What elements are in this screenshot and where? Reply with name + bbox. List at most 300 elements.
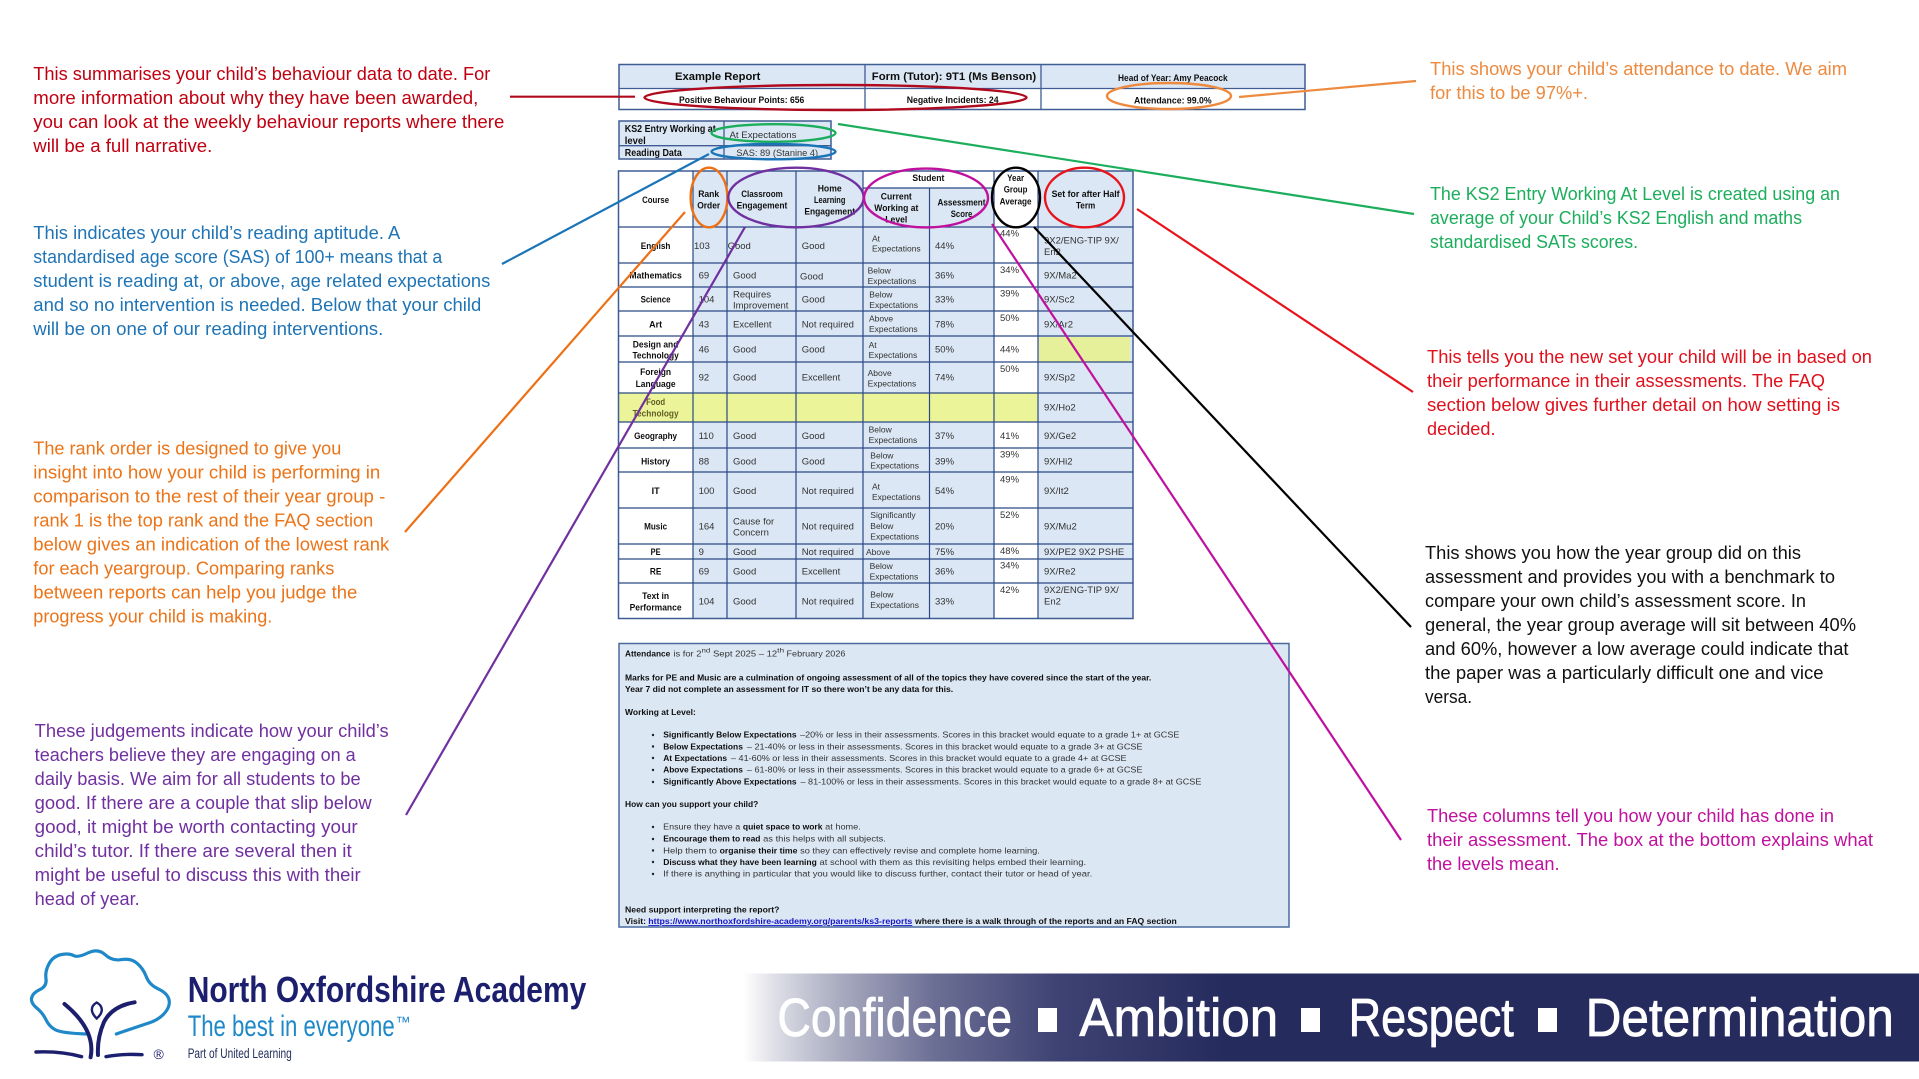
row: Mathematics: 69 xyxy=(699,271,709,282)
table column headers: Classroom xyxy=(741,189,783,200)
row: History: Good xyxy=(802,456,825,467)
row: Text in Performance: Expectations xyxy=(870,600,919,610)
text block: rank order: insight into how your child is performing in xyxy=(33,462,380,482)
attendance dates line: th xyxy=(777,648,784,654)
KS2 entry and reading data table: SAS: 89 (Stanine 4) xyxy=(736,148,818,159)
row: Art: 78% xyxy=(935,320,955,331)
report header table: Attendance: 99.0% xyxy=(1134,96,1212,106)
row: Art: 9X/Ar2 xyxy=(1044,320,1073,331)
values banner xyxy=(743,974,1919,1062)
row: PE: 9X/PE2 9X2 PSHE xyxy=(1044,547,1124,558)
table column headers: Assessment xyxy=(938,198,986,209)
text block: rank order: below gives an indication of the lowest rank xyxy=(33,534,390,554)
table column headers: Home xyxy=(818,183,842,194)
report header table: Head of Year: Amy Peacock xyxy=(1118,73,1228,84)
text block: reading aptitude: and so no intervention is needed. Below that your child xyxy=(33,295,481,315)
highlight ellipse: year group average xyxy=(992,168,1040,227)
table column headers: Student xyxy=(912,173,945,184)
text block: assessment columns: These columns tell you how your child has done in xyxy=(1427,806,1834,826)
row: History: 88 xyxy=(699,456,709,467)
table column headers xyxy=(642,173,1120,226)
arrow line: rank order xyxy=(405,212,685,532)
text block: year group average: general, the year group average will sit between 40% xyxy=(1425,615,1856,635)
row: Mathematics: Below xyxy=(868,266,892,276)
text block: attendance: for this to be 97%+. xyxy=(1430,83,1588,103)
row: Mathematics xyxy=(629,265,1077,286)
text block: engagement judgements xyxy=(35,721,389,909)
row: Geography: 9X/Ge2 xyxy=(1044,431,1076,442)
table column headers: Group xyxy=(1004,185,1028,196)
row: Science: Good xyxy=(802,295,825,306)
text block: year group average: the paper was a particularly difficult one and vice xyxy=(1425,663,1824,683)
row: English xyxy=(641,228,1119,258)
text block: rank order: The rank order is designed to give you xyxy=(33,438,341,458)
text block: set after half term xyxy=(1427,347,1872,439)
row: Science: 104 xyxy=(699,295,714,306)
row: Music: Significantly xyxy=(870,510,916,520)
KS2 entry and reading data table: At Expectations xyxy=(730,130,797,141)
text block: attendance: This shows your child’s attendance to date. We aim xyxy=(1430,59,1847,79)
row: Design and Technology: At xyxy=(869,340,877,350)
KS2 entry and reading data table: level xyxy=(625,136,646,147)
row: IT: 9X/It2 xyxy=(1044,486,1069,497)
text block: year group average: and 60%, however a low average could indicate that xyxy=(1425,639,1848,659)
row: Design and Technology: Good xyxy=(733,345,756,356)
row: Music: Concern xyxy=(733,528,769,539)
working at level list: Above Expectations xyxy=(663,765,743,775)
row: Geography: 37% xyxy=(935,431,955,442)
working at level list: – 21-40% or less in their assessments. Scores in this bracket would equate to a grade 3+ at GCSE xyxy=(747,741,1143,751)
arrow line: student columns xyxy=(992,224,1401,840)
arrow line: KS2 xyxy=(838,124,1414,214)
row: History: 39% xyxy=(935,456,955,467)
working at level list: – 41-60% or less in their assessments. Scores in this bracket would equate to a grade 4+ at GCSE xyxy=(731,753,1127,763)
row: History: Below xyxy=(870,450,894,460)
text block: reading aptitude: student is reading at, or above, age related expectations xyxy=(33,271,490,291)
row: IT: At xyxy=(872,482,881,492)
row: PE: Good xyxy=(733,547,756,558)
text block: KS2 entry level: average of your Child’s KS2 English and maths xyxy=(1430,208,1802,228)
text block: rank order: comparison to the rest of their year group - xyxy=(33,486,385,506)
row: IT xyxy=(652,474,1069,502)
KS2 entry and reading data table xyxy=(619,121,831,159)
row: Mathematics: Good xyxy=(733,271,756,282)
row: English: 103 xyxy=(694,241,710,252)
value: Ambition: Ambition xyxy=(1079,988,1278,1048)
text block: rank order xyxy=(33,438,390,626)
row: History xyxy=(641,450,1073,471)
row: PE: 48% xyxy=(1000,546,1020,557)
row: Geography: Good xyxy=(802,431,825,442)
attendance dates line: February 2026 xyxy=(786,648,846,658)
trademark: ™ xyxy=(396,1014,410,1031)
text block: year group average xyxy=(1425,543,1856,707)
report header table: Positive Behaviour Points: 656 xyxy=(679,95,804,106)
row: Music xyxy=(644,510,1077,542)
row: Food Technology: 9X/Ho2 xyxy=(1044,403,1076,414)
row: English: Expectations xyxy=(872,243,921,253)
table column headers: Average xyxy=(1000,196,1032,207)
row: Design and Technology: 46 xyxy=(699,345,709,356)
attendance dates line: is for 2 xyxy=(673,648,702,658)
row: Geography: Below xyxy=(869,425,893,435)
row: English: 9X2/ENG-TIP 9X/ xyxy=(1044,235,1119,246)
how to support list: Ensure they have a xyxy=(663,822,740,832)
text block: behaviour: more information about why they have been awarded, xyxy=(33,88,478,108)
text block: assessment columns: the levels mean. xyxy=(1427,854,1560,874)
row: Mathematics: 36% xyxy=(935,271,955,282)
how to support list: Help them to xyxy=(663,845,717,855)
text block: year group average: assessment and provides you with a benchmark to xyxy=(1425,567,1835,587)
row: RE xyxy=(650,560,1076,581)
report header table xyxy=(619,64,1305,110)
row: Design and Technology: 44% xyxy=(1000,345,1020,356)
row: Foreign Language: 92 xyxy=(699,373,709,384)
text block: set after half term: section below gives further detail on how setting is xyxy=(1427,395,1840,415)
text block: rank order: rank 1 is the top rank and the FAQ section xyxy=(33,510,373,530)
highlight ellipse: engagement xyxy=(728,168,864,227)
registered mark: ® xyxy=(154,1046,164,1062)
row: Art: Expectations xyxy=(869,324,918,334)
text block: behaviour: will be a full narrative. xyxy=(32,136,212,156)
text block: reading aptitude: standardised age score (SAS) of 100+ means that a xyxy=(33,247,443,267)
table column headers: Learning xyxy=(814,195,846,206)
table column headers: Engagement xyxy=(737,201,788,212)
text block: rank order: progress your child is making. xyxy=(33,606,272,626)
how to support list: at home. xyxy=(825,822,861,832)
row: Geography: Good xyxy=(733,431,756,442)
row: PE: Not required xyxy=(802,547,854,558)
working at level list: Significantly Below Expectations xyxy=(663,730,797,740)
text block: engagement judgements: daily basis. We aim for all students to be xyxy=(35,769,361,789)
row: Music: Below xyxy=(870,521,894,531)
row: PE xyxy=(651,546,1124,558)
subject results table xyxy=(618,171,1133,618)
row: Mathematics: Mathematics xyxy=(629,271,682,282)
row: History: Good xyxy=(733,456,756,467)
text block: year group average: compare your own child’s assessment score. In xyxy=(1425,591,1806,611)
row: IT: 49% xyxy=(1000,474,1020,485)
row: English: English xyxy=(641,241,671,252)
working at level list: –20% or less in their assessments. Scores in this bracket would equate to a grade 1+ at GCSE xyxy=(800,730,1180,740)
how to support list: Encourage them to read xyxy=(663,834,760,844)
row: Science: Requires xyxy=(733,289,771,300)
working at level list: Significantly Above Expectations xyxy=(663,777,797,787)
how to support list: organise their time xyxy=(720,845,798,855)
row: English: 44% xyxy=(1000,228,1020,239)
row: Food Technology: Food xyxy=(646,397,665,408)
row: Music: 164 xyxy=(699,522,714,533)
KS2 entry and reading data table: Reading Data xyxy=(625,148,682,159)
attendance dates line xyxy=(625,648,846,658)
KS2 entry and reading data table: KS2 Entry Working at xyxy=(625,124,716,135)
row: Geography: Geography xyxy=(634,431,678,442)
row: RE: 9X/Re2 xyxy=(1044,567,1076,578)
table column headers: Term xyxy=(1076,201,1095,212)
row: Art: Art xyxy=(649,320,663,331)
row: Text in Performance: Good xyxy=(733,597,756,608)
row: Foreign Language: Expectations xyxy=(868,379,916,389)
row: Foreign Language: 50% xyxy=(1000,364,1020,375)
row: IT: 100 xyxy=(699,486,714,497)
table column headers: Course xyxy=(642,195,669,206)
arrow line: behaviour xyxy=(510,96,635,98)
row: RE: RE xyxy=(650,567,661,578)
row: Text in Performance: Text in xyxy=(642,591,669,602)
row: Text in Performance: Below xyxy=(870,590,894,600)
row: PE: 75% xyxy=(935,547,955,558)
working at level list: – 81-100% or less in their assessments. Scores in this bracket would equate to a grade 8+ at GCSE xyxy=(800,777,1202,787)
table column headers: Score xyxy=(951,209,972,220)
support link xyxy=(625,904,1177,926)
table column headers: Order xyxy=(697,201,720,212)
row: Foreign Language: 74% xyxy=(935,373,955,384)
text block: year group average: This shows you how the year group did on this xyxy=(1425,543,1801,563)
highlight ellipse: behaviour xyxy=(644,85,1026,110)
text block: behaviour xyxy=(32,64,504,156)
row: Text in Performance: En2 xyxy=(1044,597,1061,608)
row: PE: PE xyxy=(651,547,661,558)
table column headers: Year xyxy=(1007,173,1024,184)
row: Foreign Language: Excellent xyxy=(802,373,841,384)
icon: tree outline xyxy=(31,951,169,1034)
support link: where there is a walk through of the reports and an FAQ section xyxy=(914,916,1177,926)
highlight ellipse: attendance xyxy=(1107,83,1231,109)
text block: set after half term: This tells you the new set your child will be in based on xyxy=(1427,347,1872,367)
working at level list: Below Expectations xyxy=(663,741,743,751)
row: Design and Technology: Good xyxy=(802,345,825,356)
row: Science xyxy=(641,289,1075,312)
support link: Need support interpreting the report? xyxy=(625,904,779,914)
row: English: 44% xyxy=(935,241,955,252)
row: IT: Good xyxy=(733,486,756,497)
row: Music: Cause for xyxy=(733,516,774,527)
value: Determination: Determination xyxy=(1586,988,1894,1048)
row: History: 9X/Hi2 xyxy=(1044,456,1073,467)
separator square xyxy=(1301,1008,1320,1032)
row: Science: Science xyxy=(641,295,671,306)
text block: reading aptitude xyxy=(32,223,490,339)
text block: reading aptitude: This indicates your child’s reading aptitude. A xyxy=(33,223,400,243)
row: Music: 20% xyxy=(935,522,955,533)
academy name: North Oxfordshire Academy xyxy=(188,969,586,1010)
row: Geography: 110 xyxy=(699,431,714,442)
row: Geography xyxy=(634,425,1076,445)
row: IT: Not required xyxy=(802,486,854,497)
row: Music: Expectations xyxy=(870,532,919,542)
working at level list: – 61-80% or less in their assessments. Scores in this bracket would equate to a grade 6+ at GCSE xyxy=(747,765,1143,775)
row: Mathematics: 34% xyxy=(1000,265,1020,276)
row: PE: Above xyxy=(866,547,890,557)
separator square xyxy=(1038,1008,1057,1032)
how to support list: at school with them as this revisiting helps embed their learning. xyxy=(820,857,1086,867)
row: Food Technology xyxy=(633,397,1076,420)
attendance dates line: nd xyxy=(702,648,710,654)
how to support list: If there is anything in particular that you would like to discuss further, contact their tutor or head of year. xyxy=(663,869,1092,879)
how to support list: so they can effectively revise and complete home learning. xyxy=(800,845,1040,855)
row: IT: Expectations xyxy=(872,492,921,502)
text block: behaviour: you can look at the weekly behaviour reports where there xyxy=(33,112,504,132)
row: Art: 50% xyxy=(1000,313,1020,324)
row: Text in Performance: 42% xyxy=(1000,585,1020,596)
row: RE: Expectations xyxy=(870,571,918,581)
row: English: Good xyxy=(728,241,751,252)
row: RE: 36% xyxy=(935,567,955,578)
report header table: Example Report xyxy=(675,71,761,83)
row: Mathematics: Good xyxy=(800,271,823,282)
row: History: Expectations xyxy=(870,461,919,471)
notes box xyxy=(619,644,1289,927)
text block: assessment columns: their assessment. The box at the bottom explains what xyxy=(1427,830,1873,850)
row: Science: Improvement xyxy=(733,301,789,312)
how to support list: as this helps with all subjects. xyxy=(763,834,886,844)
text block: rank order: for each yeargroup. Comparing ranks xyxy=(33,558,334,578)
how to support list: How can you support your child? xyxy=(625,799,758,809)
row: Text in Performance: Performance xyxy=(630,602,682,613)
row: RE: Good xyxy=(733,567,756,578)
row: English: En2 xyxy=(1044,247,1061,258)
row: Art: Not required xyxy=(802,320,854,331)
text block: year group average: versa. xyxy=(1425,687,1472,707)
report header table: Form (Tutor): 9T1 (Ms Benson) xyxy=(872,71,1037,83)
row: IT: 54% xyxy=(935,486,955,497)
text block: KS2 entry level: The KS2 Entry Working At Level is created using an xyxy=(1430,184,1840,204)
text block: reading aptitude: will be on one of our reading interventions. xyxy=(32,319,383,339)
row: Text in Performance xyxy=(630,585,1119,613)
row: RE: Excellent xyxy=(802,567,841,578)
row: Art: Excellent xyxy=(733,320,772,331)
icon: figure and ground xyxy=(36,1002,142,1057)
row: Mathematics: Expectations xyxy=(868,276,916,286)
row: Food Technology: Technology xyxy=(633,409,679,420)
text block: engagement judgements: head of year. xyxy=(35,889,140,909)
table column headers: Current xyxy=(881,192,913,203)
row: Science: Expectations xyxy=(869,300,918,310)
separator square xyxy=(1538,1008,1557,1032)
row: Foreign Language: 9X/Sp2 xyxy=(1044,373,1075,384)
row: Geography: 41% xyxy=(1000,431,1020,442)
working at level list: At Expectations xyxy=(663,753,727,763)
text block: engagement judgements: good. If there are a couple that slip below xyxy=(35,793,373,813)
row: Foreign Language: Above xyxy=(868,368,892,378)
text block: KS2 entry level: standardised SATs scores. xyxy=(1430,232,1638,252)
how to support list: Discuss what they have been learning xyxy=(663,857,817,867)
working at level list xyxy=(625,707,1202,787)
group line: Part of United Learning xyxy=(188,1045,292,1061)
text block: engagement judgements: teachers believe they are engaging on a xyxy=(35,745,357,765)
row: English: At xyxy=(872,233,881,243)
row: Art: Above xyxy=(869,314,893,324)
how to support list xyxy=(625,799,1092,879)
text block: rank order: between reports can help you judge the xyxy=(33,582,357,602)
assessment notes xyxy=(625,672,1151,694)
row: Design and Technology: Expectations xyxy=(869,350,917,360)
text block: engagement judgements: good, it might be worth contacting your xyxy=(35,817,358,837)
text block: set after half term: decided. xyxy=(1427,419,1496,439)
table column headers: Working at xyxy=(874,203,919,214)
row: IT: IT xyxy=(652,486,660,497)
table column headers: Engagement xyxy=(804,207,856,218)
row: Text in Performance: 104 xyxy=(699,597,714,608)
working at level list: Working at Level: xyxy=(625,707,696,717)
highlight ellipse: rank order xyxy=(691,168,727,227)
arrow line: year group xyxy=(1034,227,1411,627)
academy logo xyxy=(31,951,586,1062)
row: Mathematics: 9X/Ma2 xyxy=(1044,271,1077,282)
row: Art xyxy=(649,313,1073,334)
row: Foreign Language: Good xyxy=(733,373,756,384)
text block: attendance xyxy=(1430,59,1847,103)
attendance dates line: Attendance xyxy=(625,648,671,658)
row: RE: 34% xyxy=(1000,560,1020,571)
table column headers: Rank xyxy=(698,189,720,200)
attendance dates line: Sept 2025 – 12 xyxy=(713,648,777,658)
table column headers: Set for after Half xyxy=(1052,189,1120,200)
arrow line: engagement xyxy=(406,227,745,815)
row: Design and Technology: Design and xyxy=(633,339,679,350)
row: Art: 43 xyxy=(699,320,709,331)
row: Science: Below xyxy=(869,290,893,300)
row: Science: 39% xyxy=(1000,289,1020,300)
assessment notes: Year 7 did not complete an assessment for IT so there won’t be any data for this. xyxy=(625,684,953,694)
row: History: 39% xyxy=(1000,450,1020,461)
table column headers: Level xyxy=(885,215,907,226)
text block: engagement judgements: These judgements indicate how your child’s xyxy=(35,721,389,741)
text block: behaviour: This summarises your child’s behaviour data to date. For xyxy=(33,64,490,84)
row: RE: 69 xyxy=(699,567,709,578)
row: Foreign Language: Foreign xyxy=(640,367,671,378)
assessment notes: Marks for PE and Music are a culmination of ongoing assessment of all of the topics they have covered since the start of the year. xyxy=(625,672,1151,682)
row: Foreign Language: Language xyxy=(636,379,676,390)
strapline: The best in everyone xyxy=(188,1010,395,1043)
row: Design and Technology: 50% xyxy=(935,345,955,356)
row: PE: 9 xyxy=(699,547,704,558)
text block: engagement judgements: child’s tutor. If there are several then it xyxy=(35,841,352,861)
value: Respect: Respect xyxy=(1349,988,1514,1048)
report header table: Negative Incidents: 24 xyxy=(907,95,999,106)
support link: Visit: xyxy=(625,916,646,926)
row: RE: Below xyxy=(870,561,894,571)
highlight ellipse: student columns xyxy=(864,169,988,227)
row: Science: 33% xyxy=(935,295,955,306)
row: Geography: Expectations xyxy=(869,435,917,445)
row: Science: 9X/Sc2 xyxy=(1044,295,1075,306)
arrow line: attendance xyxy=(1239,81,1416,97)
text block: assessment columns xyxy=(1427,806,1873,874)
text block: KS2 entry level xyxy=(1430,184,1840,252)
row: Music: 52% xyxy=(1000,510,1020,521)
arrow line: reading xyxy=(502,154,709,264)
row: Music: 9X/Mu2 xyxy=(1044,522,1077,533)
row: Music: Music xyxy=(644,522,667,533)
row: History: History xyxy=(641,456,671,467)
how to support list: quiet space to work xyxy=(743,822,823,832)
highlight ellipse: KS2 level xyxy=(712,124,836,142)
row: Design and Technology xyxy=(632,339,1020,362)
row: Text in Performance: Not required xyxy=(802,597,854,608)
row: Music: Not required xyxy=(802,522,854,533)
row: Foreign Language xyxy=(636,364,1075,390)
row: Text in Performance: 9X2/ENG-TIP 9X/ xyxy=(1044,585,1119,596)
text block: engagement judgements: might be useful to discuss this with their xyxy=(35,865,361,885)
support link: https://www.northoxfordshire-academy.org/parents/ks3-reports xyxy=(648,916,913,926)
arrow line: set xyxy=(1137,209,1413,392)
row: English: Good xyxy=(802,241,825,252)
row: Text in Performance: 33% xyxy=(935,597,955,608)
highlight ellipse: set xyxy=(1045,168,1124,227)
value: Confidence: Confidence xyxy=(777,988,1012,1048)
row: Design and Technology: Technology xyxy=(632,351,679,362)
